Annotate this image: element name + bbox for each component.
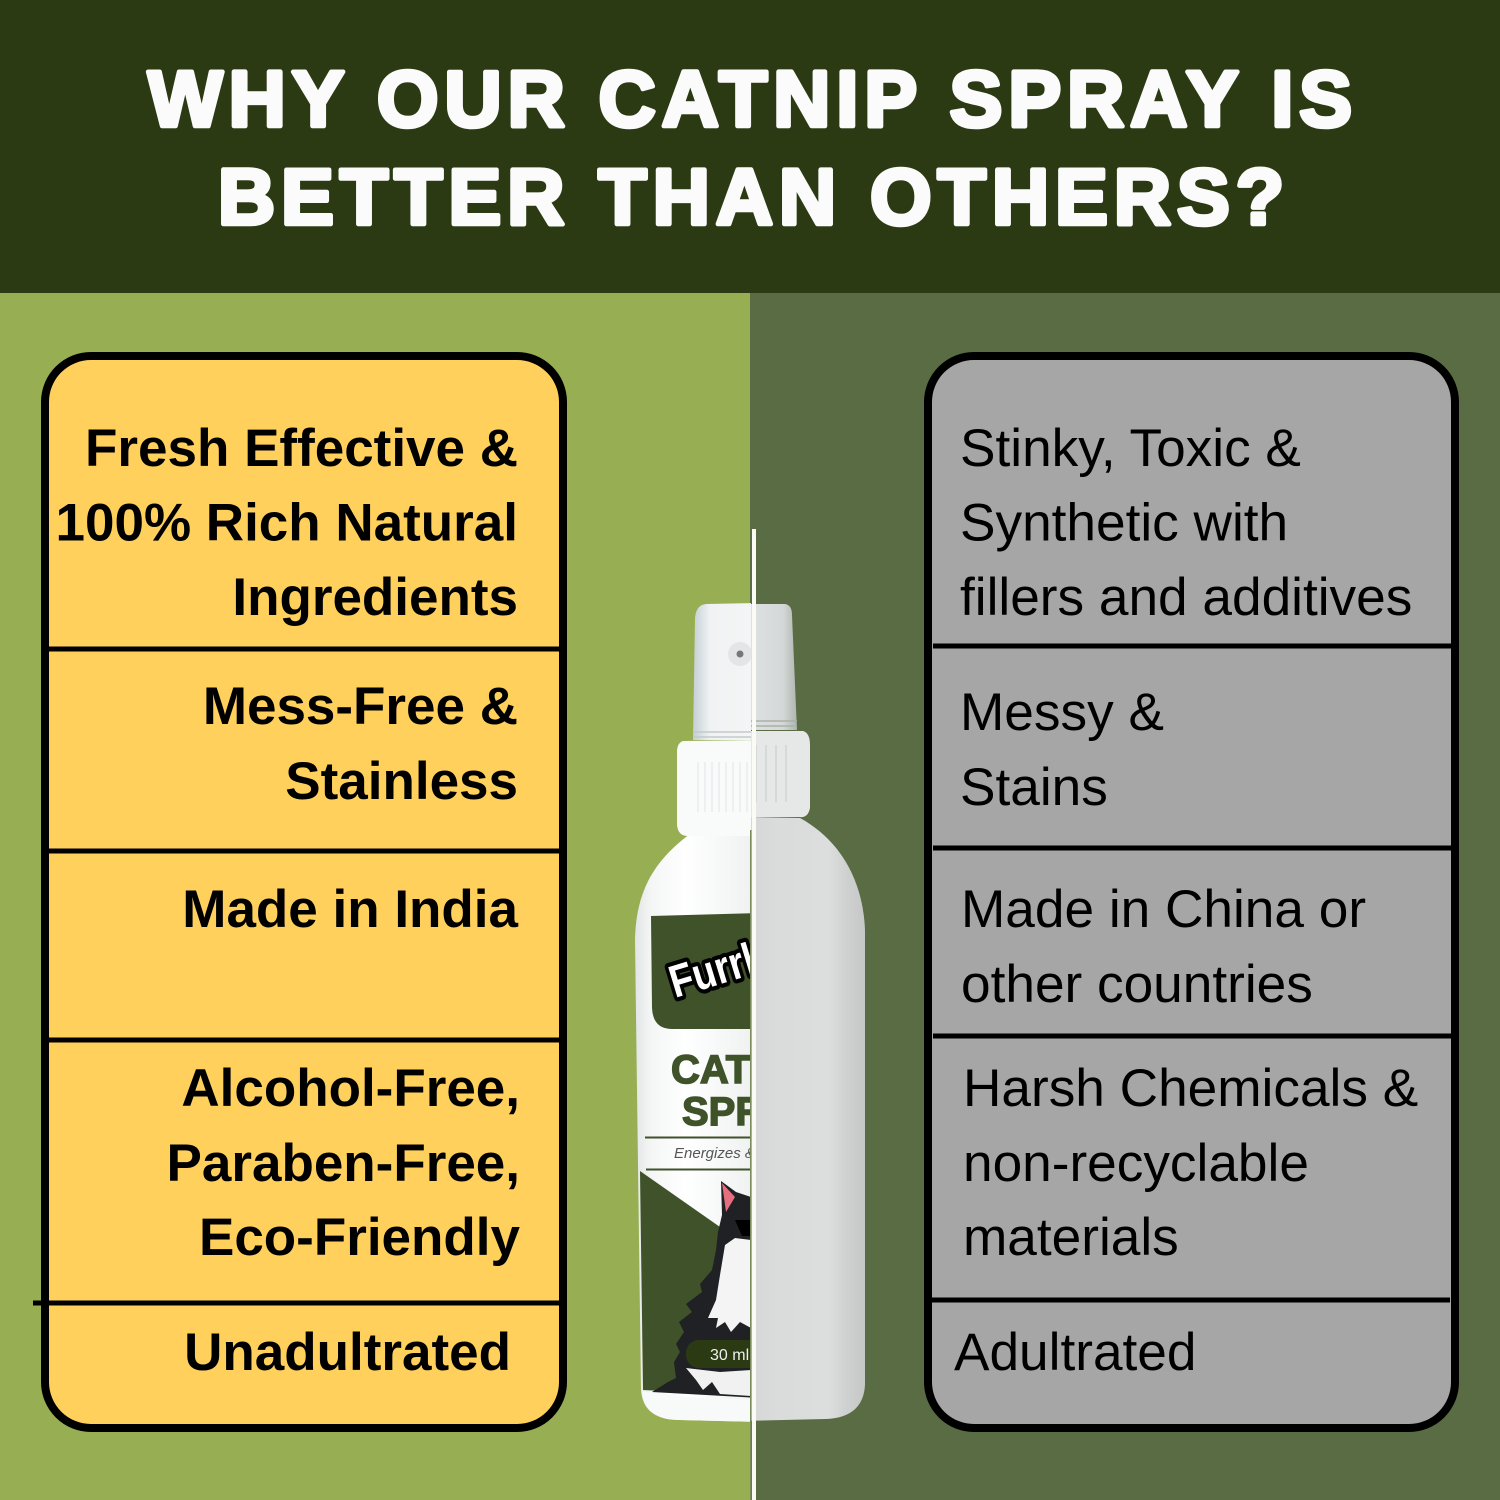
drawback: harsh chemicals: materials — [963, 1208, 1179, 1267]
panel: our catnip spray benefits — [33, 356, 563, 1428]
bottle right half — [740, 604, 865, 1421]
benefit: made in India: Made in India — [182, 880, 519, 939]
drawback: harsh chemicals: non-recyclable — [963, 1134, 1309, 1193]
title: BETTER THAN OTHERS? — [218, 152, 1284, 241]
product name: CAT — [671, 1048, 750, 1092]
product name — [672, 1054, 750, 1126]
benefit: natural ingredients: Fresh Effective & — [85, 419, 518, 478]
benefit: mess-free: Stainless — [285, 752, 518, 811]
tagline: Energizes & — [674, 1145, 755, 1162]
volume pill: 30 ml — [710, 1347, 749, 1364]
background: left green side — [0, 293, 750, 1500]
benefit: alcohol and paraben free — [167, 1059, 521, 1267]
benefit: natural ingredients — [56, 419, 518, 627]
center divider line — [750, 529, 756, 1500]
title — [148, 54, 1352, 241]
header band — [0, 0, 1500, 293]
benefit: alcohol and paraben free: Paraben-Free, — [167, 1134, 520, 1193]
drawback: harsh chemicals: Harsh Chemicals & — [963, 1059, 1418, 1118]
benefit: mess-free — [203, 677, 518, 811]
spray bottle illustration — [635, 603, 865, 1422]
drawback: stinky and synthetic — [960, 419, 1412, 627]
drawback: stinky and synthetic: Stinky, Toxic & — [960, 419, 1301, 478]
benefit: alcohol and paraben free: Alcohol-Free, — [181, 1059, 520, 1118]
drawback: made elsewhere: Made in China or — [961, 880, 1366, 939]
drawback: made elsewhere — [961, 880, 1366, 1014]
cat — [652, 1181, 750, 1398]
drawback: messy: Messy & — [960, 683, 1164, 742]
title: WHY OUR CATNIP SPRAY IS — [148, 54, 1352, 143]
drawback: messy: Stains — [960, 758, 1108, 817]
drawback: made elsewhere: other countries — [961, 955, 1313, 1014]
label: lower dark panel — [640, 1171, 720, 1391]
brand name: Furrl — [663, 933, 761, 1007]
drawback: stinky and synthetic: Synthetic with — [960, 494, 1288, 552]
benefit: natural ingredients: 100% Rich Natural — [56, 494, 518, 552]
benefit: mess-free: Mess-Free & — [203, 677, 518, 736]
drawback: harsh chemicals — [963, 1059, 1418, 1267]
drawback: stinky and synthetic: fillers and additives — [960, 568, 1412, 627]
product name: SPR — [682, 1090, 764, 1134]
drawback: adultrated: Adultrated — [954, 1323, 1196, 1382]
volume pill — [686, 1340, 750, 1368]
label: brand panel — [651, 913, 761, 1029]
benefit: natural ingredients: Ingredients — [232, 568, 518, 627]
benefit: alcohol and paraben free: Eco-Friendly — [199, 1208, 521, 1267]
bottle left half — [635, 603, 751, 1422]
panel: other products drawbacks — [928, 356, 1455, 1428]
background: right dark green side — [750, 293, 1500, 1500]
drawback: messy — [960, 683, 1164, 817]
benefit: unadultrated: Unadultrated — [184, 1323, 511, 1382]
